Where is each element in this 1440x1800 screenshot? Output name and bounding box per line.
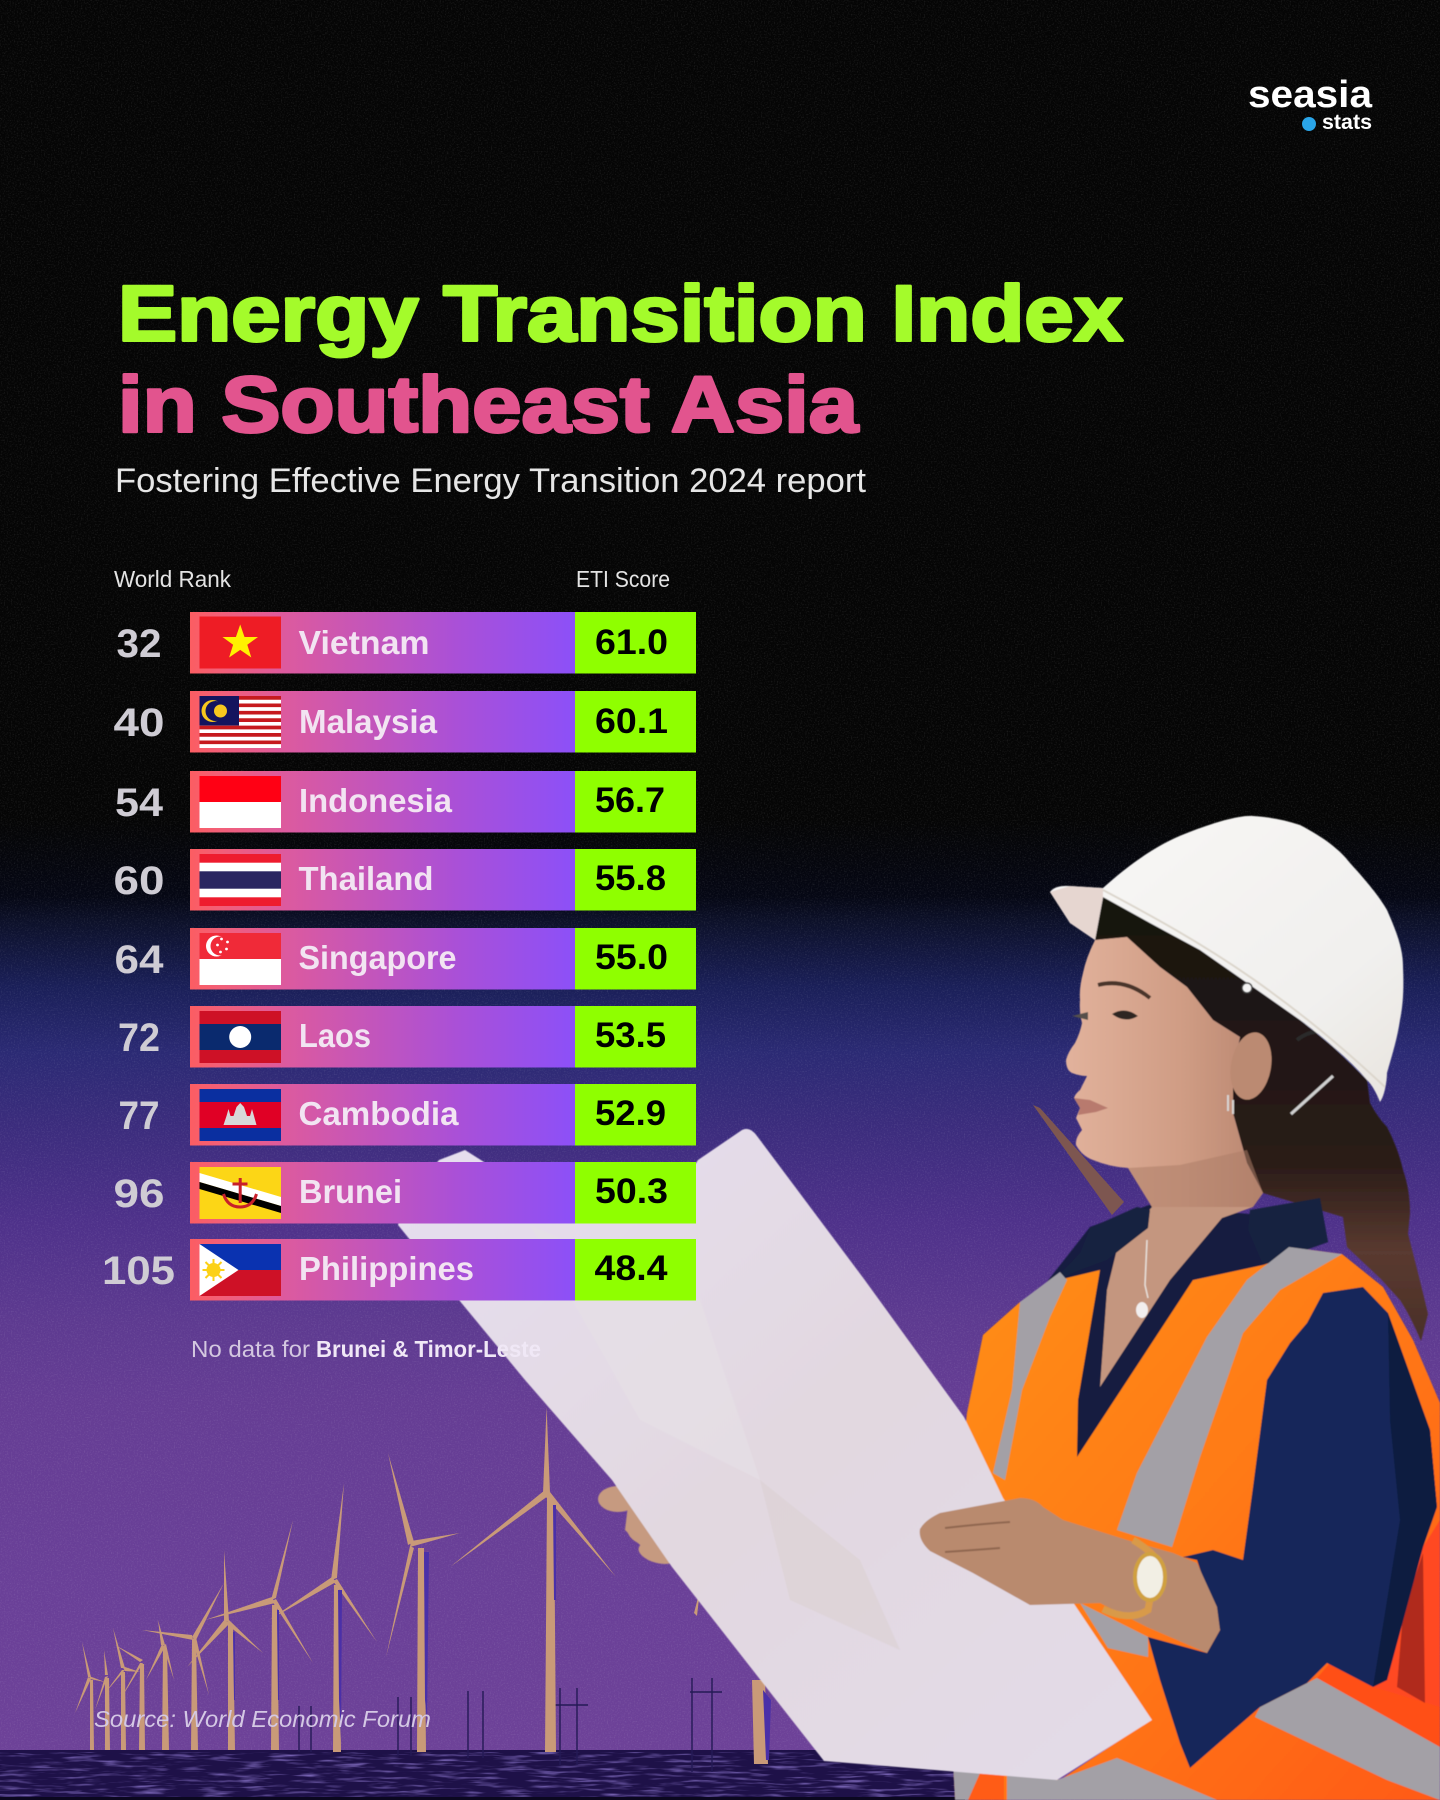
row: Malaysia [114, 691, 696, 752]
flag: Vietnam [200, 616, 281, 668]
blueprint paper [398, 1129, 1152, 1780]
face and neck top [1066, 937, 1263, 1207]
row: Malaysia: Malaysia [299, 703, 438, 740]
row: Laos: 72 [118, 1016, 160, 1060]
navy sleeve [1148, 1287, 1437, 1768]
flag: Singapore [200, 933, 281, 985]
row: Singapore [114, 928, 696, 990]
row: Philippines: 48.4 [594, 1249, 668, 1288]
row: Indonesia: 56.7 [595, 781, 665, 820]
flag: Philippines [200, 1244, 281, 1296]
row: Brunei: Brunei [299, 1173, 402, 1210]
row: Indonesia [115, 771, 696, 832]
flag: Malaysia [200, 696, 281, 748]
shirt V neck [1046, 1198, 1328, 1457]
row: Thailand: Thailand [298, 860, 434, 897]
row: Vietnam: 61.0 [595, 623, 668, 662]
row: Cambodia: 52.9 [595, 1094, 666, 1133]
reflective stripes [953, 1247, 1440, 1800]
chart column headers: ETI Score [576, 566, 670, 592]
background turbine blade behind head [1033, 1105, 1124, 1215]
lips [1074, 1098, 1108, 1115]
row: Philippines: Philippines [299, 1250, 474, 1287]
row: Malaysia: 60.1 [595, 702, 668, 741]
title: Energy Transition Index [118, 268, 1123, 358]
safety vest body [953, 1247, 1440, 1800]
row: Cambodia [118, 1084, 696, 1146]
jaw shadow [1128, 1150, 1263, 1207]
title: in Southeast Asia [118, 360, 859, 448]
footnote: no data: No data for [191, 1336, 310, 1362]
left fingers [598, 1486, 680, 1568]
row: Philippines: 105 [102, 1249, 175, 1293]
right hand and forearm [920, 1498, 1220, 1653]
eyebrows and eyes [1098, 983, 1150, 998]
lower and side orange panels [968, 1767, 1004, 1800]
row: Thailand: 60 [114, 859, 164, 903]
engineer woman figure [398, 816, 1440, 1800]
row: Cambodia: 77 [118, 1094, 160, 1138]
row: Laos [118, 1006, 696, 1068]
row: Indonesia: Indonesia [299, 782, 453, 819]
earring [1228, 1095, 1233, 1114]
hair clip strap [1291, 1076, 1333, 1114]
chart column headers: World Rank [114, 566, 231, 592]
wind turbines landscape [0, 1407, 965, 1800]
footnote: no data [191, 1336, 541, 1362]
icon: globe dot [1302, 117, 1316, 131]
row: Laos: 53.5 [595, 1016, 666, 1055]
row: Singapore: 64 [114, 938, 164, 982]
row: Thailand: 55.8 [595, 859, 666, 898]
row: Malaysia: 40 [114, 701, 164, 745]
logo: seasia stats [1248, 74, 1373, 134]
source: Source: World Economic Forum [94, 1706, 431, 1732]
flag: Brunei [200, 1167, 281, 1219]
necklace [1145, 1240, 1148, 1298]
flag: Laos [200, 1011, 281, 1063]
row: Brunei: 50.3 [595, 1172, 668, 1211]
ponytail hair [1095, 897, 1428, 1341]
hard hat [1050, 816, 1403, 1102]
row: Indonesia: 54 [115, 781, 164, 825]
row: Cambodia: Cambodia [298, 1095, 459, 1132]
footnote: no data: Brunei & Timor-Leste [316, 1336, 541, 1362]
row: Vietnam [116, 612, 696, 674]
row: Philippines [102, 1239, 696, 1300]
flag: Thailand [200, 854, 281, 906]
collars [1052, 1198, 1328, 1282]
title [118, 268, 1123, 448]
row: Laos: Laos [299, 1017, 371, 1054]
logo: seasia stats: seasia [1248, 74, 1373, 116]
row: Brunei [114, 1162, 696, 1224]
ranking table [102, 612, 696, 1300]
row: Vietnam: 32 [116, 622, 162, 666]
neck skin [1100, 1207, 1253, 1387]
logo: seasia stats: stats [1322, 111, 1372, 134]
wristwatch [1103, 1540, 1165, 1616]
flag: Cambodia [200, 1089, 281, 1141]
ear [1225, 1029, 1277, 1103]
subtitle: Fostering Effective Energy Transition 2024 report [115, 462, 867, 500]
tan blades and towers [543, 1407, 550, 1495]
row: Thailand [114, 849, 696, 910]
row: Singapore: 55.0 [595, 938, 668, 977]
row: Vietnam: Vietnam [298, 624, 430, 661]
row: Singapore: Singapore [298, 939, 456, 976]
row: Brunei: 96 [114, 1172, 164, 1216]
chart column headers [114, 566, 670, 592]
flag: Indonesia [200, 776, 281, 828]
